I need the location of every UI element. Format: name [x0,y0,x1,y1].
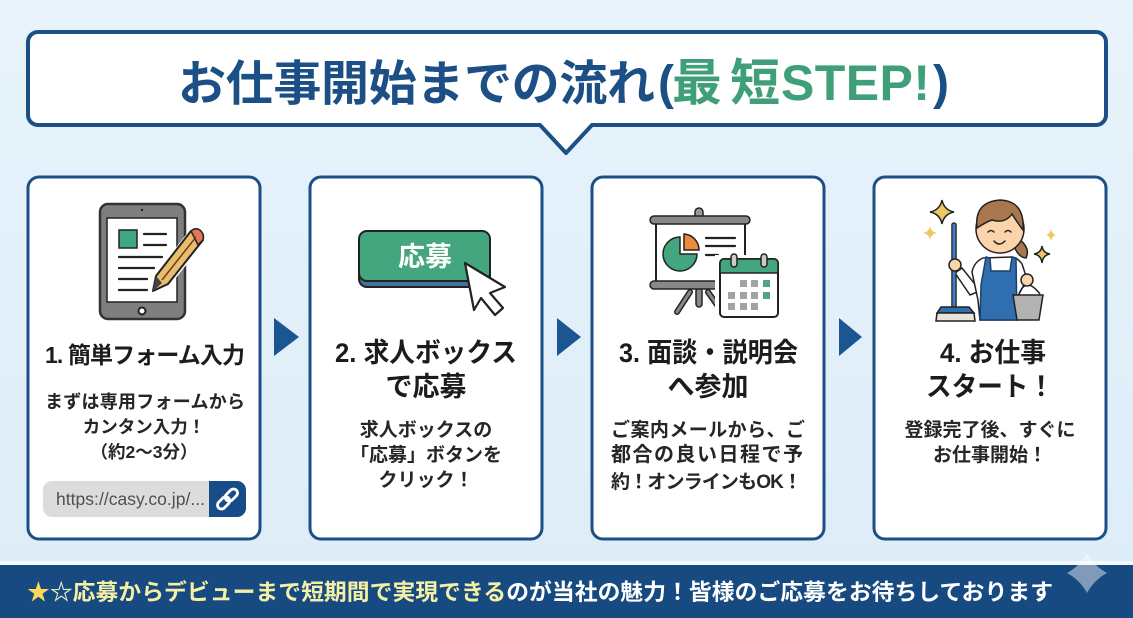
step 1 body [45,392,245,462]
title text: STEP! [781,55,930,111]
icon: sparkle [1067,553,1107,593]
panel: step 2 [310,177,542,539]
step 4 heading: スタート！ [926,372,1054,402]
title text [178,55,949,111]
icon: apply button with cursor: 応募 [398,242,452,272]
step 4 heading: 4. お仕事 [940,338,1046,368]
step 3 body: 約！オンラインもOK！ [611,471,802,493]
icon: apply button with cursor [359,231,505,315]
icon: tablet with pencil [100,204,204,319]
icon: chain link [216,487,239,511]
panel: step 1 [28,177,260,539]
step 2 heading: で応募 [386,372,466,402]
step 2 heading: 2. 求人ボックス [335,338,517,368]
icon: cleaning staff with sparkles [923,200,1056,321]
link bar [43,481,246,517]
step 2 body: クリック！ [378,469,474,491]
title banner [28,32,1106,153]
title text: 最短 [672,55,780,111]
title text: ( [658,57,674,110]
step 3 heading: 3. 面談・説明会 [619,338,798,368]
step 3 body: 都合の良い日程で予 [611,443,803,466]
link bar: https://casy.co.jp/... [56,489,205,509]
step 4 body: お仕事開始！ [933,444,1047,466]
step 3 body [611,418,805,493]
step 2 body: 求人ボックスの [360,418,492,441]
footer message: ★☆応募からデビューまで短期間で実現できるのが当社の魅力！皆様のご応募をお待ちしております [27,579,1053,605]
step 2 heading [335,338,517,402]
icon: presentation board and calendar [650,208,779,319]
title text: ) [933,57,949,110]
arrow 3 [839,318,862,356]
arrow 2 [557,318,581,356]
arrow 1 [274,318,299,356]
step 3 body: ご案内メールから、ご [611,418,805,441]
step 3 heading [619,338,798,402]
panel: step 4 [874,177,1106,539]
title text: お仕事開始までの流れ [178,58,655,111]
panel: step 3 [592,177,824,539]
step 4 body [904,419,1076,466]
step 2 body: 「応募」ボタンを [350,444,502,466]
step 1 body: カンタン入力！ [83,417,205,437]
step 3 heading: へ参加 [668,372,748,402]
step 4 body: 登録完了後、すぐに [904,419,1076,441]
step 4 heading [926,338,1054,402]
step 1 body: まずは専用フォームから [45,392,245,412]
step 2 body [350,418,502,491]
step 1 heading: 1. 簡単フォーム入力 [45,342,245,368]
step 1 body: （約2〜3分） [91,442,197,462]
footer band [0,553,1133,618]
